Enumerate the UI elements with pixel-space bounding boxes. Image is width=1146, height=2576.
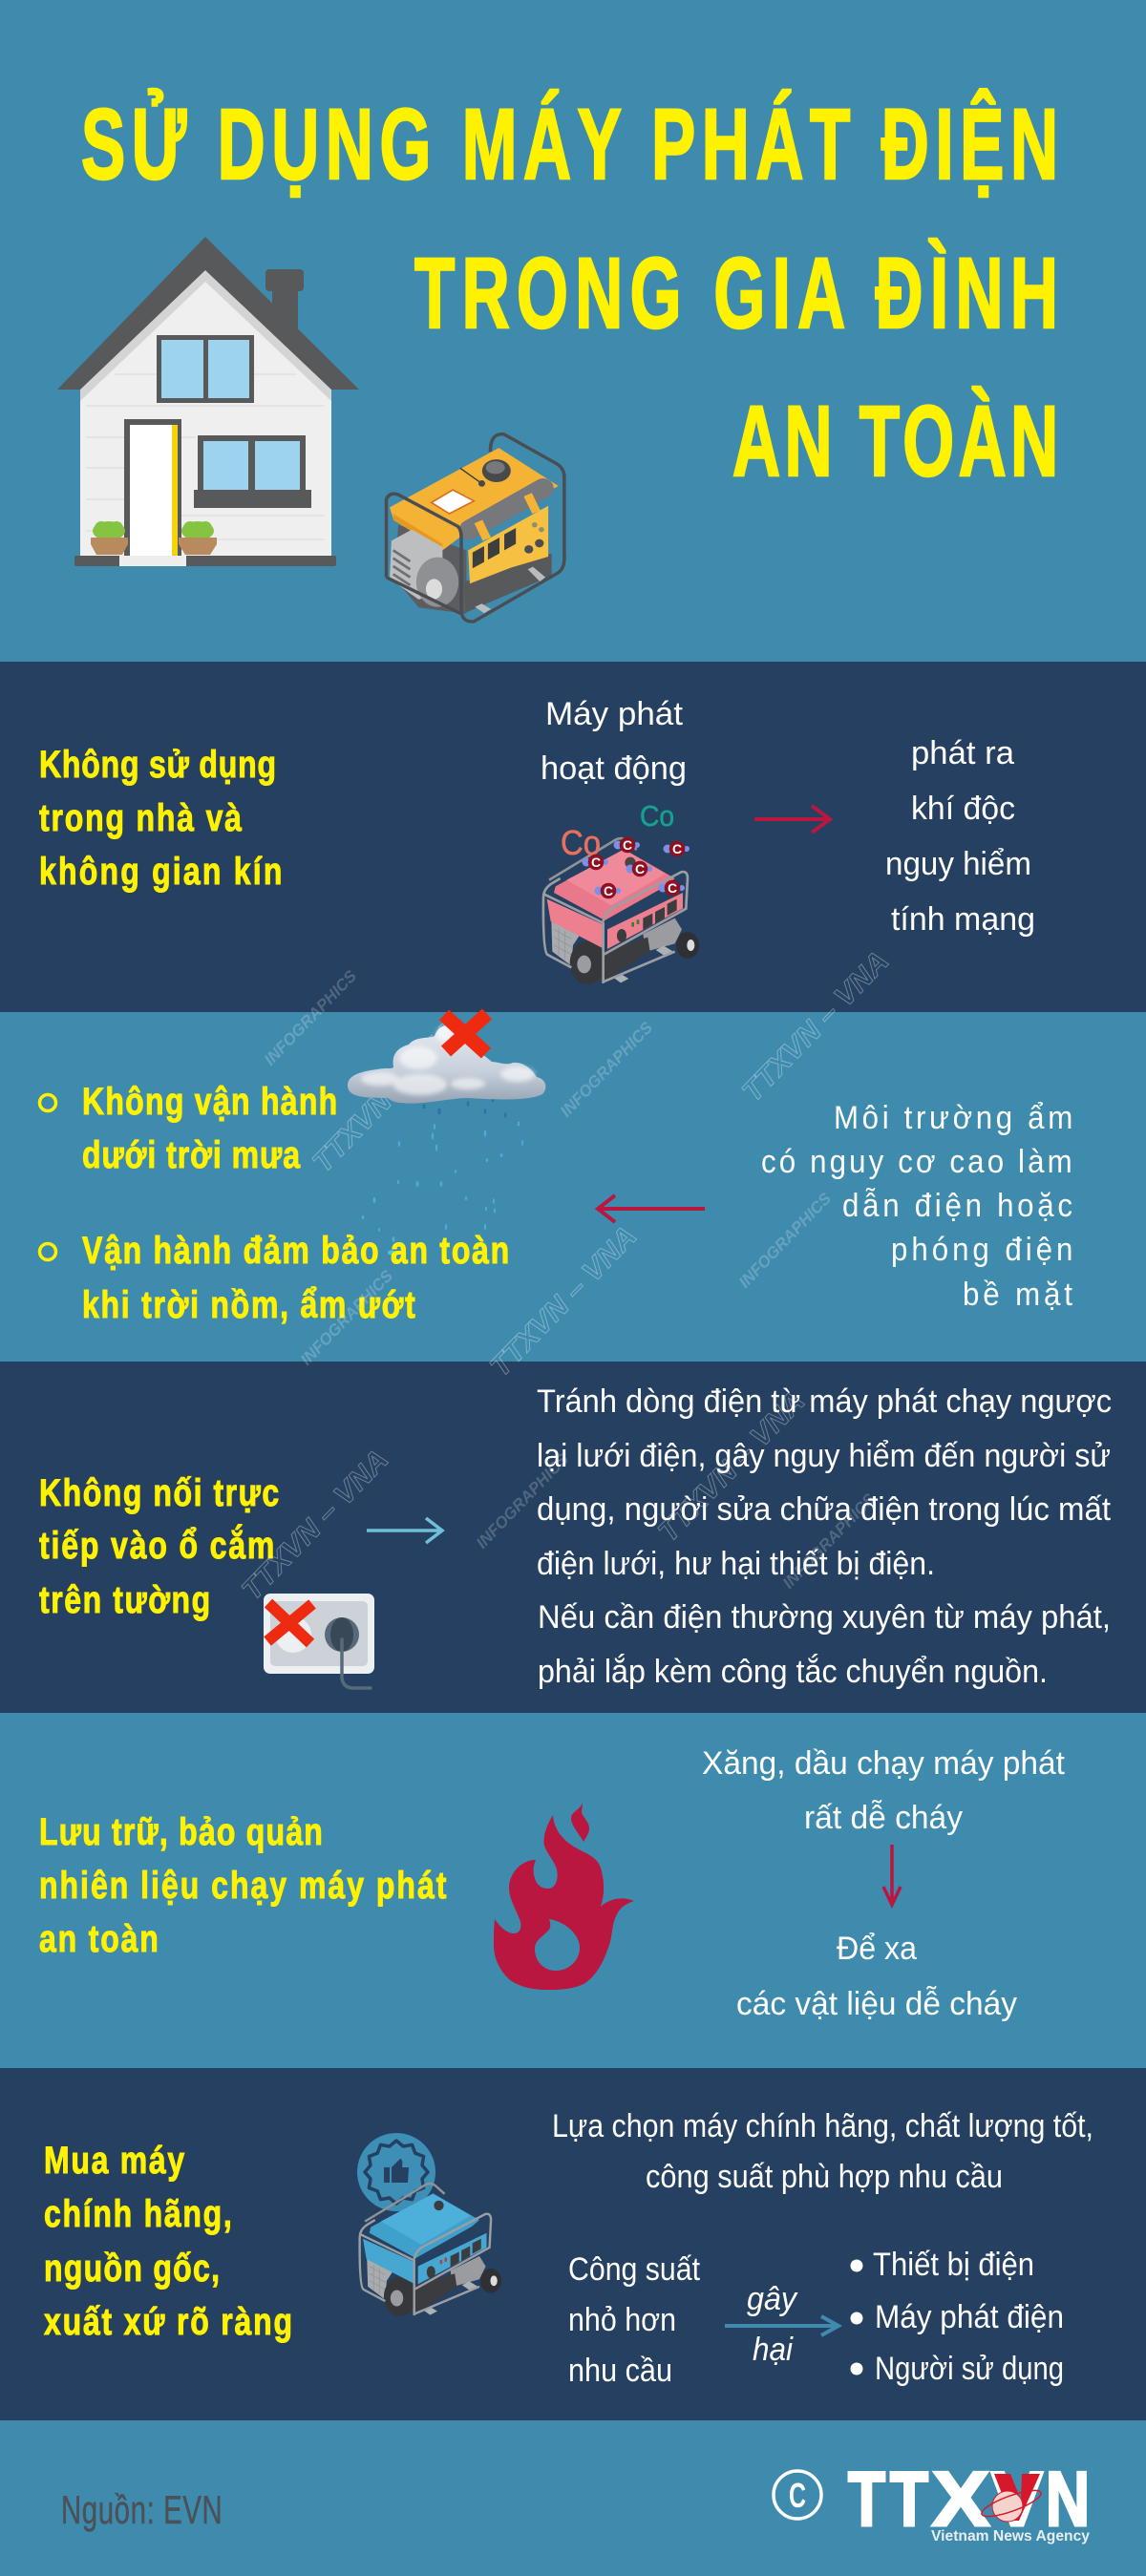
heading: buying genuine: chính hãng, — [44, 2192, 232, 2235]
watermarks — [236, 945, 895, 1607]
text: causes harm: hại — [753, 2332, 794, 2368]
icon: CO molecules: C — [604, 883, 613, 898]
heading: wall socket: trên tường — [39, 1578, 210, 1621]
text: backfeed explanation: phải lắp kèm công tắc chuyển nguồn. — [538, 1654, 1048, 1690]
logo: TTXVN: Vietnam News Agency — [931, 2528, 1090, 2544]
arrow: from humidity text — [598, 1195, 705, 1222]
heading: buying genuine — [44, 2139, 292, 2343]
text: undersized capacity: nhu cầu — [568, 2353, 672, 2389]
text: humid environment risk: phóng điện — [891, 1231, 1072, 1267]
text: choose genuine: Lựa chọn máy chính hãng, chất lượng tốt, — [552, 2108, 1093, 2144]
icon: CO molecules — [583, 837, 690, 898]
text: keep away: các vật liệu dễ cháy — [736, 1986, 1017, 2022]
heading: fuel storage — [39, 1810, 446, 1960]
icon: CO molecules: C — [672, 841, 682, 856]
logo: TTXVN: V — [991, 2457, 1043, 2543]
bullet: no rain — [40, 1094, 55, 1111]
watermarks: INFOGRAPHICS — [297, 1266, 397, 1369]
icon: cloud — [348, 1025, 545, 1104]
text: humid environment risk: bề mặt — [963, 1276, 1072, 1312]
panel: footer — [0, 2420, 1146, 2576]
icon: CO molecules: C — [623, 837, 632, 853]
watermark: behind cloud: TTXVN – VNA — [307, 1016, 465, 1179]
text: toxic gas danger: tính mạng — [891, 901, 1035, 938]
text: toxic gas danger: khí độc — [911, 791, 1015, 827]
text: fuel flammable: rất dễ cháy — [804, 1800, 963, 1836]
heading: buying genuine: nguồn gốc, — [44, 2247, 220, 2290]
icon: copyright: C — [789, 2476, 806, 2515]
text: keep away — [736, 1931, 1017, 2022]
watermarks: INFOGRAPHICS — [779, 1489, 880, 1593]
watermarks: INFOGRAPHICS — [557, 1018, 657, 1121]
icon: pink generator emitting CO — [543, 799, 699, 984]
text: undersized capacity — [568, 2251, 700, 2389]
text: no operation in rain — [82, 1080, 337, 1176]
list: harmed items — [850, 2247, 1064, 2387]
arrow: down — [883, 1845, 901, 1905]
text: backfeed explanation — [537, 1383, 1112, 1690]
arrow: to toxic gas — [754, 806, 830, 833]
title: TRONG GIA ĐÌNH — [414, 236, 1058, 348]
text: humid environment risk: dẫn điện hoặc — [842, 1187, 1072, 1223]
text: humid environment risk — [761, 1099, 1072, 1312]
label: CO coral: Co — [561, 823, 601, 862]
text: no operation in rain: Không vận hành — [82, 1080, 337, 1123]
text: backfeed explanation: Nếu cần điện thường xuyên từ máy phát, — [538, 1599, 1111, 1636]
label: CO teal: Co — [640, 799, 674, 833]
icon: CO molecules: C — [635, 861, 645, 876]
text: backfeed explanation: điện lưới, hư hại thiết bị điện. — [537, 1546, 935, 1582]
icon: red cross on cloud — [444, 1014, 487, 1053]
text: keep away: Để xa — [837, 1931, 917, 1967]
text: toxic gas danger: phát ra — [911, 735, 1014, 771]
list: harmed items: Máy phát điện — [875, 2299, 1064, 2335]
icon: quality badge — [357, 2133, 435, 2211]
heading: buying genuine: xuất xứ rõ ràng — [44, 2300, 292, 2343]
watermarks: INFOGRAPHICS — [473, 1449, 573, 1552]
list: harmed items: Thiết bị điện — [873, 2247, 1034, 2283]
heading: fuel storage: an toàn — [39, 1917, 159, 1960]
panel: fuel storage — [0, 1713, 1146, 2068]
logo: TTXVN: N — [1046, 2457, 1090, 2543]
heading: buying genuine: Mua máy — [44, 2139, 184, 2182]
watermarks: TTXVN – VNA — [236, 1444, 394, 1607]
text: backfeed explanation: dụng, người sửa chữa điện trong lúc mất — [537, 1491, 1112, 1528]
logo: TTXVN — [848, 2457, 1090, 2544]
text: safe operation in humidity: khi trời nồm, ẩm ướt — [82, 1283, 415, 1326]
heading: fuel storage: nhiên liệu chạy máy phát — [39, 1864, 446, 1907]
logo: TTXVN: T — [890, 2457, 928, 2543]
text: no operation in rain: dưới trời mưa — [82, 1133, 301, 1176]
title: AN TOÀN — [732, 384, 1058, 496]
icon: blue generator — [360, 2184, 501, 2316]
text: causes harm — [747, 2281, 798, 2368]
watermarks: INFOGRAPHICS — [261, 966, 361, 1069]
text: source: Nguồn: EVN — [61, 2487, 223, 2532]
text: fuel flammable — [702, 1745, 1066, 1836]
list: harmed items: Người sử dụng — [875, 2351, 1064, 2387]
icon: yellow generator — [387, 434, 564, 622]
watermarks: TTXVN – VNA — [736, 945, 895, 1109]
heading: fuel storage: Lưu trữ, bảo quản — [39, 1810, 323, 1853]
text: fuel flammable: Xăng, dầu chạy máy phát — [702, 1745, 1066, 1782]
logo: TTXVN: X — [932, 2457, 989, 2543]
bullet: humidity — [40, 1243, 55, 1260]
heading: indoor use: trong nhà và — [39, 796, 243, 839]
icon: wall socket with cross — [264, 1594, 374, 1688]
icon: copyright — [774, 2471, 821, 2519]
text: generator running — [541, 696, 687, 787]
icon: CO molecules: C — [591, 855, 601, 870]
arrow: to explanation — [367, 1518, 442, 1543]
watermarks: INFOGRAPHICS — [735, 1189, 836, 1292]
heading: wall socket: tiếp vào ổ cắm — [39, 1522, 274, 1567]
panel: buying genuine — [0, 2068, 1146, 2420]
text: causes harm: gây — [747, 2281, 798, 2317]
text: toxic gas danger — [885, 735, 1035, 938]
heading: indoor use: Không sử dụng — [39, 743, 276, 786]
text: humid environment risk: có nguy cơ cao làm — [761, 1143, 1072, 1179]
text: safe operation in humidity: Vận hành đảm bảo an toàn — [82, 1229, 509, 1272]
logo: TTXVN: T — [848, 2457, 885, 2543]
text: generator running: Máy phát — [545, 696, 684, 732]
watermarks: TTXVN – VNA — [484, 1220, 643, 1383]
text: toxic gas danger: nguy hiểm — [885, 846, 1031, 882]
heading: indoor use — [39, 743, 282, 893]
panel: rain and humidity — [0, 1012, 1146, 1362]
heading: wall socket — [39, 1471, 279, 1621]
text: backfeed explanation: Tránh dòng điện từ máy phát chạy ngược — [537, 1383, 1112, 1420]
icon: house — [57, 237, 359, 566]
text: choose genuine: công suất phù hợp nhu cầu — [646, 2159, 1003, 2195]
arrow: harm — [725, 2316, 838, 2335]
watermarks: TTXVN – VNA — [652, 1385, 811, 1549]
icon: rain drops — [362, 1098, 523, 1255]
text: undersized capacity: nhỏ hơn — [568, 2302, 676, 2338]
title: SỬ DỤNG MÁY PHÁT ĐIỆN — [81, 87, 1058, 200]
text: choose genuine — [552, 2108, 1093, 2195]
text: humid environment risk: Môi trường ẩm — [834, 1099, 1072, 1135]
text: safe operation in humidity — [82, 1229, 509, 1326]
text: backfeed explanation: lại lưới điện, gây nguy hiểm đến người sử — [537, 1438, 1111, 1474]
text: generator running: hoạt động — [541, 750, 687, 787]
icon: flame — [494, 1803, 634, 1990]
panel: no wall socket — [0, 1362, 1146, 1713]
panel: no indoor use — [0, 662, 1146, 1012]
icon: CO molecules: C — [668, 880, 677, 896]
text: undersized capacity: Công suất — [568, 2251, 700, 2288]
heading: wall socket: Không nối trực — [39, 1471, 279, 1514]
title — [81, 87, 1058, 496]
list: rain warnings — [40, 1080, 509, 1326]
heading: indoor use: không gian kín — [39, 850, 282, 893]
